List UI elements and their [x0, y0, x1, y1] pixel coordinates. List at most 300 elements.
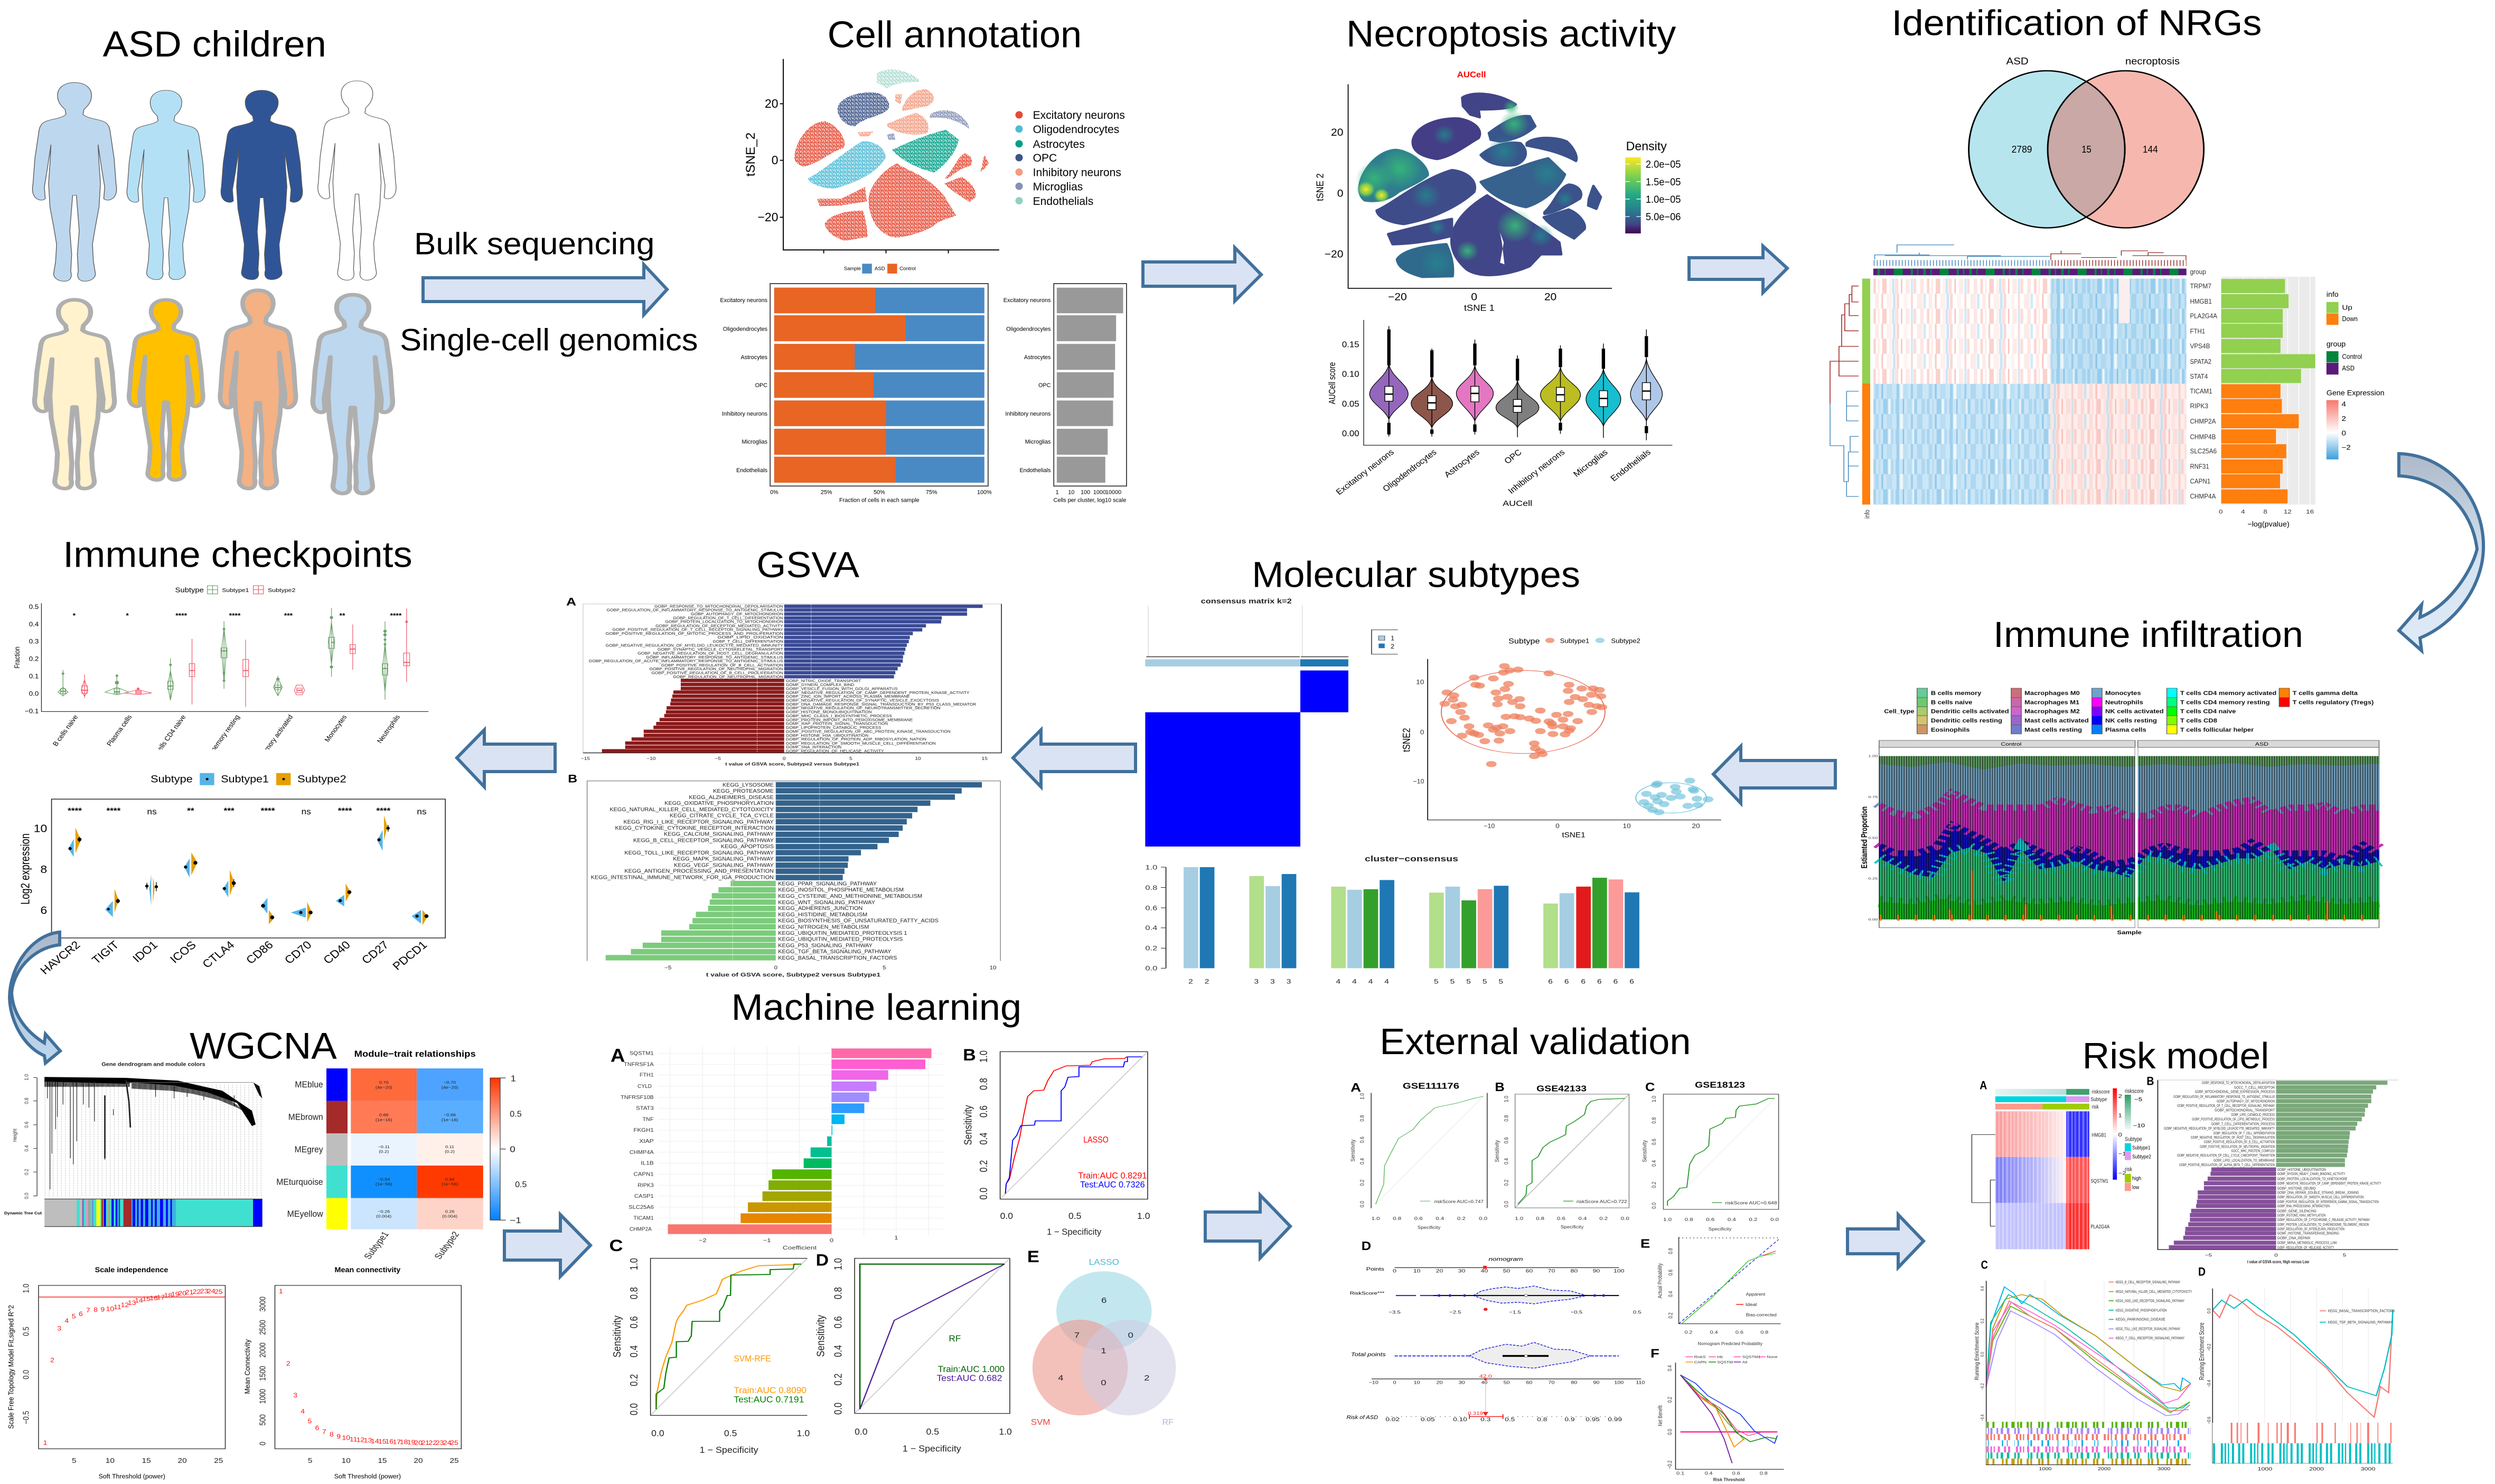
- chart: AUCell score violins: Excitatory neurons: [1334, 448, 1396, 497]
- chart: B GSE42133 ROC: 0.8: [1536, 1216, 1544, 1221]
- chart: module-trait relationships heatmap: MEturquoise: [276, 1177, 323, 1187]
- chart: mean connectivity: 3000: [258, 1297, 268, 1312]
- chart: immune cell fraction violins: 0.1: [29, 672, 39, 680]
- chart: scale independence: 5: [72, 1457, 77, 1465]
- chart: B GSVA high versus low bars: GOBP_REGULATION_OF_CYTOCHROME_C_RELEASE_ACTIVITY_PATHWAY: [2277, 1218, 2370, 1222]
- legend: cell types: Macrophages M0: [2024, 690, 2080, 697]
- chart: GSVA GO pathways bars: GOMF_SNA_INTERACTION: [786, 745, 841, 749]
- chart: E Venn LASSO SVM RF: SVM: [1031, 1417, 1050, 1426]
- chart: mean connectivity: Mean connectivity: [334, 1266, 401, 1274]
- legend: density colour bar: 5.0e−06: [1646, 212, 1681, 223]
- chart: D nomogram: 0.10: [1453, 1416, 1467, 1423]
- chart: A coefficient bars: IL1B: [641, 1161, 654, 1166]
- chart: GSVA GO pathways bars: GOBP_HISTONE_MONOUBIQUITINATION: [786, 710, 872, 715]
- chart: module-trait relationships heatmap: −0.26: [378, 1209, 390, 1214]
- chart: -log(pvalue) bars: 0: [2219, 508, 2223, 515]
- chart: E Venn LASSO SVM RF: E: [1027, 1247, 1039, 1266]
- legend: info, group and gene expression: 2: [2342, 415, 2346, 422]
- chart: D RF ROC: [814, 1251, 1012, 1453]
- legend: density colour bar: 1.5e−05: [1646, 177, 1681, 188]
- chart: GSVA GO pathways bars: GOBP_INFLAMMATORY_RESPONSE_TO_ANTIGENIC_STIMULUS: [646, 655, 783, 660]
- chart: A GSE111176 ROC: 0.0: [1359, 1201, 1366, 1207]
- chart: immune cell fraction violins: ***: [284, 612, 293, 619]
- chart: C GSEA enrichment plot: KEGG_B_CELL_RECEPTOR_SIGNALING_PATHWAY: [2116, 1280, 2181, 1284]
- chart: AUCell density tSNE: 20: [1331, 127, 1343, 138]
- chart: GSVA KEGG pathways bars: KEGG_LYSOSOME: [723, 782, 774, 788]
- chart: immune cell fraction violins: −0.1: [25, 707, 39, 715]
- chart: B GSVA high versus low bars: GOCC_T_CELL_RECEPTOR: [2234, 1085, 2275, 1089]
- chart: module-trait relationships heatmap: MEgrey: [295, 1145, 323, 1154]
- title: External validation: External validation: [1380, 1021, 1691, 1062]
- chart: cells per cluster bars: 1000: [1093, 490, 1106, 496]
- chart: mean connectivity: 12: [357, 1436, 364, 1443]
- chart: B GSVA high versus low bars: B: [2146, 1074, 2154, 1087]
- legend: cell types: Dendritic cells activated: [1931, 708, 2009, 715]
- chart: fraction of cells stacked bars: Astrocytes: [741, 354, 768, 361]
- legend: consensus clusters: [1372, 630, 1398, 654]
- chart: GSVA GO pathways bars: GOMF_NEGATIVE_REGULATION_OF_CAMP_DEPENDENT_PROTEIN_KINASE_ACTIVITY: [786, 690, 970, 695]
- chart: D RF ROC: 0.8: [832, 1287, 844, 1299]
- chart: D nomogram: 30: [1459, 1380, 1465, 1385]
- chart: GSVA GO pathways bars: GOBP_NITRIC_OXIDE_TRANSPORT: [786, 679, 861, 683]
- chart: checkpoint gene half violins: [18, 799, 445, 977]
- chart: F decision curve: SQSTM: [1717, 1360, 1733, 1364]
- legend: cell types: B cells naive: [1931, 699, 1972, 706]
- chart: D GSEA enrichment plot: −0.2: [2206, 1344, 2212, 1351]
- chart: gene dendrogram and module colors: [4, 1062, 262, 1227]
- chart: B GSVA high versus low bars: GOBP_DNA_REPAIR_DOUBLE_STRAND_BREAK_JOINING: [2277, 1191, 2359, 1195]
- chart: F decision curve: 0.2: [1667, 1397, 1673, 1403]
- chart: A risk score heatmap: A: [1980, 1078, 1987, 1092]
- chart: immune cell fraction violins: T cells CD4 memory resting: [187, 713, 241, 783]
- chart: B LASSO ROC: 1.0: [1137, 1211, 1150, 1220]
- chart: D nomogram: Total points: [1351, 1351, 1386, 1358]
- chart: F decision curve: [1650, 1346, 1784, 1482]
- chart: cluster-consensus bars: 6: [1581, 978, 1586, 985]
- title: Cell annotation: Cell annotation: [828, 13, 1082, 55]
- chart: D nomogram: 70: [1549, 1380, 1554, 1385]
- chart: scale independence: 8: [93, 1306, 98, 1313]
- chart: subtype tSNE scatter: Subtype2: [1611, 637, 1640, 644]
- legend: info, group and gene expression: Up: [2342, 304, 2352, 311]
- chart: gene dendrogram and module colors: 0.8: [24, 1098, 30, 1104]
- chart: B LASSO ROC: 0.6: [977, 1105, 990, 1117]
- chart: immune cell fraction violins: B cells naive: [51, 713, 80, 747]
- legend: cell types: [1884, 688, 2374, 734]
- legend: cell types: Mast cells resting: [2024, 727, 2082, 734]
- chart: checkpoint gene half violins: ****: [68, 806, 82, 815]
- chart: GSVA KEGG pathways bars: KEGG_TOLL_LIKE_RECEPTOR_SIGNALING_PATHWAY: [624, 850, 774, 856]
- chart: E calibration curve: 0.4: [1667, 1291, 1674, 1297]
- chart: AUCell density tSNE: −20: [1388, 292, 1407, 303]
- chart: scale independence: 13: [128, 1299, 136, 1307]
- chart: C GSEA enrichment plot: −0.4: [1980, 1414, 1985, 1421]
- chart: C GSEA enrichment plot: −0.2: [1980, 1383, 1985, 1390]
- chart: B GSVA high versus low bars: 5: [2343, 1253, 2347, 1258]
- chart: module-trait relationships heatmap: 0.66: [379, 1112, 389, 1117]
- chart: D nomogram: 40: [1481, 1269, 1488, 1274]
- chart: mean connectivity: 1000: [258, 1389, 268, 1404]
- icons: lower row of outlined child silhouettes: [34, 290, 393, 493]
- chart: C GSEA enrichment plot: 0.0: [1980, 1352, 1985, 1357]
- chart: mean connectivity: 1: [279, 1288, 283, 1295]
- chart: B GSVA high versus low bars: GOBP_LIPID_CATABOLIC_PROCESS: [2231, 1113, 2275, 1117]
- title: Immune infiltration: Immune infiltration: [1993, 614, 2303, 655]
- chart: fraction of cells stacked bars: 25%: [821, 490, 832, 496]
- chart: B GSVA high versus low bars: GOBP_PROTEIN_LOCALIZATION_TO_CHROMOSOME_TELOMERIC_REGION: [2277, 1223, 2369, 1226]
- chart: GSVA GO pathways bars: GOBP_LIPID_OXIDATION: [717, 635, 783, 640]
- chart: B LASSO ROC: 1 − Specificity: [1047, 1227, 1102, 1236]
- chart: GSVA GO pathways bars: GOBP_NEGATIVE_REGULATION_OF_HOST_CELL_DEGRANULATION: [637, 651, 783, 655]
- title: Immune checkpoints: Immune checkpoints: [63, 534, 412, 575]
- chart: GSVA GO pathways bars: GOBP_REGULATION_OF_ACUTE_INFLAMMATORY_RESPONSE_TO_ANTIGENIC_STIMULUS: [589, 659, 783, 663]
- chart: GSVA KEGG pathways bars: KEGG_BIOSYNTHESIS_OF_UNSATURATED_FATTY_ACIDS: [778, 918, 939, 924]
- chart: AUCell density tSNE: AUCell: [1457, 70, 1486, 79]
- chart: GSVA GO pathways bars: −10: [646, 756, 655, 762]
- chart: -log(pvalue) bars: 4: [2241, 508, 2245, 515]
- chart: immune cell fraction violins: Monocytes: [323, 713, 349, 743]
- chart: immune cell fraction violins: *: [73, 612, 76, 619]
- chart: AUCell score violins: OPC: [1503, 448, 1524, 466]
- chart: module-trait relationships heatmap: 0: [510, 1144, 515, 1154]
- chart: GSVA KEGG pathways bars: KEGG_CYTOKINE_CYTOKINE_RECEPTOR_INTERACTION: [615, 825, 774, 831]
- chart: C SVM-RFE ROC: 0.8: [627, 1287, 640, 1299]
- chart: mean connectivity: 22: [429, 1439, 437, 1446]
- chart: E calibration curve: 0.4: [1710, 1330, 1718, 1335]
- chart: immune cell fraction violins: 0.4: [29, 621, 39, 628]
- chart: subtype tSNE scatter: 0: [1555, 823, 1560, 830]
- chart: A GSE111176 ROC: 0.4: [1436, 1216, 1445, 1221]
- chart: immune cell fraction violins: Fraction: [13, 646, 21, 669]
- chart: GSVA GO pathways bars: GOBP_REGULATION_OF_T_CELL_DIFFERENTIATION: [673, 616, 783, 620]
- title: Machine learning: Machine learning: [731, 986, 1021, 1028]
- chart: module-trait relationships heatmap: (1e−56): [442, 1182, 458, 1187]
- chart: B GSVA high versus low bars: GOMF_NEGATIVE_REGULATION_OF_CAMP_DEPENDENT_PROTEIN_KINASE_ACTIVITY: [2277, 1181, 2381, 1186]
- chart: checkpoint gene half violins: 8: [41, 863, 47, 876]
- chart: C GSEA enrichment plot: KEGG_OXIDATIVE_PHOSPHORYLATION: [2116, 1308, 2167, 1312]
- chart: A coefficient bars: RIPK3: [637, 1182, 654, 1188]
- chart: D RF ROC: Test:AUC 0.682: [936, 1373, 1002, 1383]
- chart: D RF ROC: 1.0: [832, 1258, 844, 1270]
- chart: mean connectivity: 7: [322, 1428, 326, 1435]
- chart: D nomogram: 70: [1548, 1269, 1555, 1274]
- chart: scale independence: 0.0: [22, 1370, 31, 1379]
- chart: A risk score heatmap: Subtype1: [2132, 1145, 2150, 1151]
- chart: fraction of cells stacked bars: 0%: [770, 490, 778, 496]
- chart: module-trait relationships heatmap: (0.004): [376, 1214, 391, 1219]
- chart: cluster-consensus bars: 3: [1254, 978, 1259, 985]
- chart: GSVA GO pathways bars: GOMF_POSITIVE_REGULATION_OF_ABC_PROTEIN_KINASE_TRANSDUCTION: [786, 729, 951, 734]
- chart: GSVA KEGG pathways bars: KEGG_INOSITOL_PHOSPHATE_METABOLISM: [778, 887, 904, 893]
- chart: mean connectivity: 6: [315, 1424, 319, 1432]
- chart: F decision curve: Risk Threshold: [1713, 1477, 1744, 1482]
- chart: AUCell score violins: Microglias: [1571, 448, 1610, 479]
- chart: scale independence: 14: [135, 1297, 143, 1304]
- panel: immune checkpoints: [13, 534, 445, 977]
- chart: B GSE42133 ROC: 1.0: [1504, 1096, 1510, 1102]
- chart: AUCell score violins: 0.05: [1342, 400, 1359, 409]
- chart: subtype tSNE scatter: Subtype1: [1560, 637, 1589, 644]
- legend: cell types: Eosinophils: [1931, 727, 1969, 734]
- chart: cells per cluster bars: 100: [1081, 490, 1090, 496]
- chart: AUCell density tSNE: tSNE 1: [1464, 303, 1495, 313]
- chart: checkpoint gene half violins: ****: [107, 806, 121, 815]
- chart: checkpoint gene half violins: **: [187, 806, 194, 815]
- chart: module-trait relationships heatmap: 0.26: [445, 1209, 455, 1214]
- chart: estimated immune cell proportion stacked bars: Control: [2001, 741, 2021, 747]
- chart: subtype tSNE scatter: 0: [1420, 729, 1424, 736]
- chart: scale independence: 15: [142, 1295, 151, 1302]
- chart: F decision curve: −0.2: [1667, 1460, 1673, 1469]
- chart: scale independence: 25: [214, 1457, 223, 1465]
- chart: cells per cluster bars: OPC: [1038, 382, 1051, 389]
- chart: cluster-consensus bars: 0.0: [1145, 965, 1157, 972]
- chart: F decision curve: None: [1767, 1355, 1778, 1359]
- chart: scale independence: Scale Free Topology Model Fit,signed R^2: [6, 1305, 15, 1429]
- chart: checkpoint gene half violins: PDCD1: [390, 938, 430, 972]
- chart: D RF ROC: 1 − Specificity: [903, 1444, 961, 1453]
- title: GSVA: GSVA: [756, 544, 859, 585]
- arrow: molecular subtypes to GSVA: [1013, 730, 1136, 787]
- chart: A GSE111176 ROC: riskScore AUC=0.747: [1434, 1199, 1484, 1204]
- chart: A risk score heatmap: −5: [2134, 1097, 2143, 1103]
- chart: cells per cluster bars: Oligodendrocytes: [1006, 326, 1051, 332]
- chart: B LASSO ROC: Test:AUC 0.7326: [1080, 1180, 1145, 1189]
- chart: checkpoint gene half violins: CTLA4: [200, 938, 237, 970]
- legend: sample: ASD: [875, 266, 885, 272]
- chart: checkpoint gene half violins: CD27: [359, 938, 391, 966]
- chart: cells per cluster bars: Excitatory neurons: [1003, 297, 1051, 304]
- panel: cell annotation: [720, 13, 1127, 503]
- chart: B LASSO ROC: 1.0: [977, 1050, 990, 1063]
- chart: C GSE18123 ROC: 0.0: [1651, 1203, 1657, 1209]
- chart: B LASSO ROC: 0.5: [1068, 1211, 1081, 1220]
- chart: A coefficient bars: CYLD: [637, 1084, 652, 1089]
- chart: D nomogram: −1.5: [1509, 1310, 1521, 1315]
- chart: GSVA GO pathways bars: GOBP_AUTOPHAGY_OF_MITOCHONDRION: [691, 612, 783, 616]
- chart: GSVA GO pathways bars: GOBP_REGULATION_OF_SMOOTH_MUSCLE_CELL_DIFFERENTIATION: [786, 741, 936, 746]
- chart: AUCell score violins: Inhibitory neurons: [1506, 448, 1567, 496]
- chart: GSVA GO pathways bars: GOMF_RAP_PROTEIN_SIGNAL_TRANSDUCTION: [786, 721, 888, 726]
- chart: B GSE42133 ROC: 0.4: [1578, 1216, 1587, 1221]
- chart: A risk score heatmap: Subtype: [2090, 1097, 2107, 1103]
- chart: B GSVA high versus low bars: GOBP_LIPID_LOCALIZATION_TO_MEMBRANE: [2213, 1159, 2275, 1162]
- chart: AUCell score violins: 0.00: [1342, 429, 1359, 438]
- chart: A risk score heatmap: PLA2G4A: [2090, 1224, 2109, 1230]
- title: ASD children: ASD children: [103, 24, 326, 64]
- chart: C SVM-RFE ROC: Test:AUC 0.7191: [734, 1395, 804, 1404]
- chart: GSVA GO pathways bars: [566, 596, 1001, 767]
- chart: NRG expression heatmap: CHMP4A: [2190, 492, 2216, 500]
- chart: B GSVA high versus low bars: GOBP_NEGATIVE_REGULATION_OF_HOST_CELL_DEGRANULATION: [2191, 1135, 2275, 1140]
- chart: NRG expression heatmap: TICAM1: [2190, 387, 2212, 395]
- chart: D nomogram: 0.3: [1480, 1416, 1491, 1423]
- chart: D RF ROC: 0.4: [832, 1345, 844, 1357]
- chart: NRG expression heatmap: [1830, 245, 2218, 519]
- chart: scale independence: 6: [79, 1310, 83, 1318]
- title: WGCNA: WGCNA: [190, 1025, 337, 1067]
- chart: B GSE42133 ROC: [1494, 1080, 1629, 1230]
- chart: GSVA KEGG pathways bars: KEGG_ANTIGEN_PROCESSING_AND_PRESENTATION: [624, 868, 774, 874]
- chart: A risk score heatmap: −2: [2118, 1170, 2126, 1176]
- chart: cluster-consensus bars: 0.6: [1145, 905, 1157, 912]
- legend: cell types: Astrocytes: [1033, 138, 1085, 151]
- chart: C GSEA enrichment plot: KEGG_TOLL_LIKE_RECEPTOR_SIGNALING_PATHWAY: [2116, 1327, 2181, 1331]
- chart: mean connectivity: 14: [371, 1438, 379, 1445]
- chart: A GSE111176 ROC: 0.6: [1414, 1216, 1423, 1221]
- chart: GSVA GO pathways bars: 15: [982, 756, 988, 762]
- chart: mean connectivity: 2000: [258, 1342, 268, 1358]
- chart: C GSEA enrichment plot: 0.2: [1980, 1319, 1985, 1323]
- legend: cell types: T cells CD8: [2180, 717, 2217, 724]
- panel: GSVA: [566, 544, 1001, 978]
- chart: B GSE42133 ROC: 0.6: [1557, 1216, 1565, 1221]
- chart: module-trait relationships heatmap: [276, 1049, 527, 1261]
- chart: C SVM-RFE ROC: 0.6: [627, 1316, 640, 1328]
- legend: cell types: B cells memory: [1931, 690, 1982, 697]
- chart: GSVA KEGG pathways bars: KEGG_CYSTEINE_AND_METHIONINE_METABOLISM: [778, 894, 922, 899]
- chart: C GSE18123 ROC: 0.6: [1706, 1217, 1715, 1223]
- arrow: immune infiltration to molecular subtypes: [1713, 746, 1835, 803]
- chart: D nomogram: −3.5: [1389, 1310, 1401, 1315]
- chart: D nomogram: 110: [1636, 1380, 1645, 1385]
- chart: GSVA GO pathways bars: GOBP_REGULATION_OF_INFLAMMATORY_RESPONSE_TO_ANTIGENIC_STIMULUS: [607, 608, 783, 613]
- chart: mean connectivity: 5: [308, 1457, 313, 1465]
- chart: scale independence: 11: [114, 1303, 121, 1311]
- legend: density colour bar: [1625, 139, 1681, 233]
- chart: GSVA KEGG pathways bars: KEGG_BASAL_TRANSCRIPTION_FACTORS: [778, 955, 897, 961]
- chart: checkpoint gene half violins: ****: [376, 806, 391, 815]
- title: Risk model: Risk model: [2083, 1036, 2269, 1076]
- chart: subtype tSNE scatter: −10: [1413, 778, 1424, 785]
- chart: immune cell fraction violins: 0.5: [29, 603, 39, 610]
- chart: E calibration curve: 0.6: [1667, 1270, 1674, 1275]
- chart: B GSVA high versus low bars: GOBP_RESPONSE_TO_MITOCHONDRIAL_DEPOLARISATION: [2202, 1081, 2275, 1085]
- chart: NRG expression heatmap: FTH1: [2190, 327, 2205, 335]
- chart: GSVA KEGG pathways bars: 10: [990, 965, 997, 971]
- chart: GSVA GO pathways bars: GOBP_NEGATIVE_REGULATION_OF_NEUROTRANSMITTER_SECRETION: [786, 706, 941, 710]
- chart: B GSE42133 ROC: 0.0: [1621, 1216, 1629, 1221]
- chart: GSVA KEGG pathways bars: KEGG_OXIDATIVE_PHOSPHORYLATION: [664, 801, 774, 806]
- chart: estimated immune cell proportion stacked bars: 0.00: [1868, 918, 1878, 921]
- chart: checkpoint gene half violins: Log2 expression: [18, 833, 32, 905]
- legend: info, group and gene expression: [2327, 290, 2385, 459]
- legend: cell types: Oligodendrocytes: [1033, 124, 1119, 136]
- chart: checkpoint gene half violins: ICOS: [167, 938, 199, 965]
- chart: Venn diagram ASD and necroptosis: necroptosis: [2125, 57, 2180, 67]
- chart: E calibration curve: Bias-corrected: [1746, 1313, 1777, 1318]
- chart: immune cell fraction violins: 0.3: [29, 637, 39, 645]
- chart: C SVM-RFE ROC: Sensitivity: [611, 1315, 623, 1358]
- chart: GSVA GO pathways bars: GOBP_POSITIVE_REGULATION_OF_MITOTIC_PROCESS_AND_PROLIFERATION: [606, 632, 783, 636]
- chart: D GSEA enrichment plot: 3000: [2361, 1467, 2375, 1472]
- chart: B GSVA high versus low bars: GOMF_HISTONE_TRANSFERASE_BINDING: [2277, 1232, 2339, 1235]
- chart: A coefficient bars: Coefficient: [783, 1245, 817, 1251]
- chart: D nomogram: 60: [1526, 1380, 1532, 1385]
- legend: cell types: Cell_type: [1884, 708, 1915, 715]
- chart: B GSVA high versus low bars: 0: [2274, 1253, 2278, 1258]
- chart: A risk score heatmap: 2: [2118, 1093, 2122, 1099]
- chart: module-trait relationships heatmap: (4e−20): [376, 1085, 392, 1089]
- chart: B GSVA high versus low bars: GOBP_HISTONE_UBIQUITINATION: [2277, 1168, 2326, 1172]
- chart: GSVA KEGG pathways bars: KEGG_INTESTINAL_IMMUNE_NETWORK_FOR_IGA_PRODUCTION: [591, 875, 774, 880]
- chart: scale independence: 18: [164, 1292, 172, 1299]
- legend: cell types: T cells regulatory (Tregs): [2293, 699, 2374, 706]
- chart: module-trait relationships heatmap: 0.70: [379, 1080, 389, 1085]
- chart: mean connectivity: 1500: [258, 1366, 268, 1381]
- chart: subtype tSNE scatter: −10: [1484, 823, 1495, 830]
- chart: AUCell density tSNE: 20: [1544, 292, 1556, 303]
- legend: info, group and gene expression: info: [2327, 290, 2339, 299]
- chart: B LASSO ROC: LASSO: [1083, 1134, 1109, 1144]
- chart: cluster-consensus bars: 6: [1597, 978, 1602, 985]
- chart: gene dendrogram and module colors: 0.6: [24, 1122, 30, 1128]
- chart: GSVA GO pathways bars: −5: [715, 756, 721, 762]
- chart: D GSEA enrichment plot: D: [2198, 1265, 2206, 1278]
- chart: cluster-consensus bars: cluster−consensus: [1365, 854, 1458, 863]
- chart: scale independence: 12: [121, 1301, 129, 1309]
- chart: fraction of cells stacked bars: Microglias: [742, 439, 768, 445]
- chart: E calibration curve: 0.2: [1684, 1330, 1692, 1335]
- chart: B GSVA high versus low bars: GOBP_MRNA_METABOLIC_PROCESS_LINK: [2277, 1241, 2337, 1245]
- text: Bulk sequencing: Bulk sequencing: [414, 227, 654, 261]
- chart: D RF ROC: Train:AUC 1.000: [938, 1364, 1005, 1374]
- chart: B GSE42133 ROC: GSE42133: [1536, 1084, 1587, 1093]
- chart: cluster-consensus bars: 6: [1614, 978, 1618, 985]
- chart: gene dendrogram and module colors: 0.4: [24, 1145, 30, 1152]
- legend: cell types: T cells follicular helper: [2180, 727, 2254, 734]
- chart: scale independence: 24: [207, 1288, 215, 1295]
- chart: immune cell fraction violins: ****: [229, 612, 241, 619]
- panel: identification of NRGs: [1830, 3, 2385, 528]
- chart: cluster-consensus bars: 4: [1384, 978, 1389, 985]
- chart: mean connectivity: 4: [301, 1408, 305, 1415]
- chart: mean connectivity: Soft Threshold (power): [334, 1473, 401, 1480]
- chart: D nomogram: 0.95: [1586, 1416, 1600, 1423]
- chart: D nomogram: [1346, 1239, 1645, 1423]
- chart: B GSVA high versus low bars: GOBP_MITOCHONDRIAL_GENE_EXPRESSION_PROCESS: [2195, 1090, 2275, 1094]
- chart: C GSEA enrichment plot: Running Enrichment Score: [1974, 1322, 1981, 1380]
- chart: AUCell score violins: [1327, 320, 1672, 508]
- chart: checkpoint gene half violins: ns: [147, 807, 157, 816]
- chart: D GSEA enrichment plot: KEGG_TGF_BETA_SIGNALING_PATHWAY: [2328, 1320, 2393, 1325]
- chart: immune cell fraction violins: [13, 603, 428, 788]
- legend: info, group and gene expression: Gene Expression: [2327, 389, 2385, 397]
- chart: D RF ROC: 1.0: [999, 1426, 1012, 1436]
- chart: A coefficient bars: 1: [894, 1235, 898, 1241]
- chart: GSVA GO pathways bars: A: [566, 596, 576, 608]
- chart: D RF ROC: 0.5: [926, 1426, 939, 1436]
- chart: B GSE42133 ROC: riskScore AUC=0.722: [1577, 1199, 1627, 1204]
- chart: D nomogram: 100: [1614, 1380, 1624, 1385]
- arrow: necroptosis to NRGs: [1689, 246, 1787, 293]
- chart: GSVA KEGG pathways bars: KEGG_UBIQUITIN_MEDIATED_PROTEOLYSIS 1: [778, 931, 907, 936]
- chart: C GSEA enrichment plot: KEGG_PARKINSONS_DISEASE: [2116, 1318, 2165, 1321]
- chart: E Venn LASSO SVM RF: 4: [1058, 1374, 1064, 1383]
- chart: NRG expression heatmap: HMGB1: [2190, 297, 2212, 305]
- text: Single-cell genomics: Single-cell genomics: [400, 323, 698, 357]
- chart: D GSEA enrichment plot: 2000: [2309, 1467, 2324, 1472]
- chart: cluster-consensus bars: 3: [1270, 978, 1275, 985]
- chart: GSVA GO pathways bars: GOBP_RESPONSE_TO_MITOCHONDRIAL_DEPOLARISATION: [654, 604, 783, 609]
- chart: cluster-consensus bars: 5: [1466, 978, 1471, 985]
- chart: B LASSO ROC: Sensitivity: [962, 1105, 974, 1145]
- legend: cell types: T cells CD4 memory resting: [2180, 699, 2270, 706]
- chart: estimated immune cell proportion stacked bars: Estiamted Proportion: [1860, 806, 1869, 868]
- chart: A coefficient bars: −2: [699, 1237, 707, 1244]
- chart: D RF ROC: Sensitivity: [814, 1314, 827, 1357]
- chart: cells per cluster bars: Astrocytes: [1024, 354, 1051, 361]
